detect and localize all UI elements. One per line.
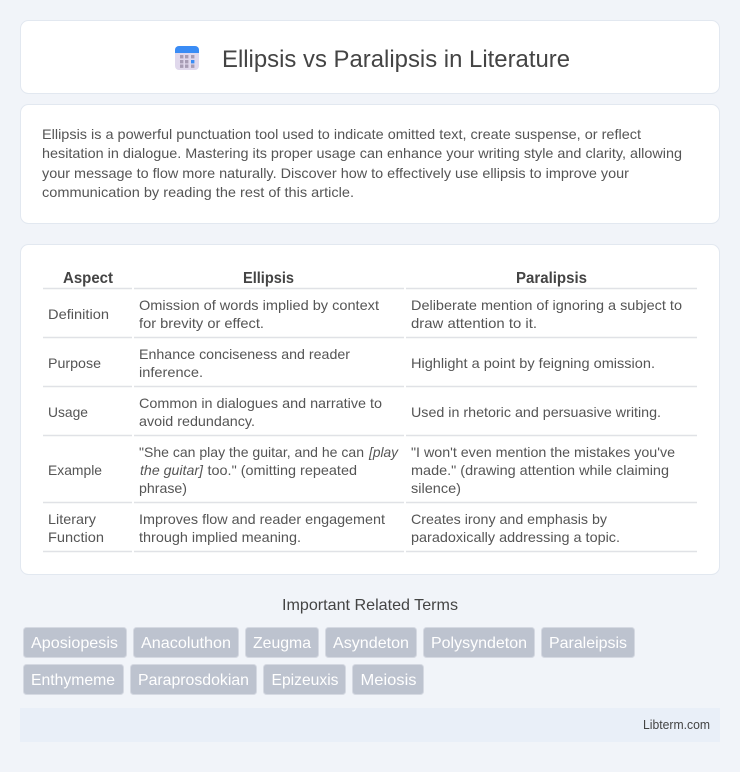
table row: literary function: through implied meaning. <box>139 529 301 545</box>
tag: Aposiopesis: Aposiopesis <box>31 635 118 652</box>
tag: Polysyndeton <box>424 628 534 658</box>
table row: literary function <box>48 511 620 545</box>
footer credit: Libterm.com <box>643 718 710 732</box>
table header: Paralipsis <box>516 270 587 287</box>
title: Ellipsis vs Paralipsis in Literature <box>222 46 570 73</box>
panel: title header <box>20 20 720 94</box>
tag: Aposiopesis <box>24 628 126 658</box>
table row: definition: Omission of words implied by context <box>139 297 379 313</box>
footer <box>20 708 720 742</box>
tag: Polysyndeton: Polysyndeton <box>431 635 527 652</box>
table header: Ellipsis <box>243 270 294 287</box>
table row: example: phrase) <box>139 480 187 496</box>
tag: Asyndeton <box>326 628 416 658</box>
table row: literary function: Improves flow and reader engagement <box>139 511 385 527</box>
table row: purpose: inference. <box>139 364 203 380</box>
heading: related terms: Important Related Terms <box>282 597 458 614</box>
panel: comparison table <box>20 244 720 574</box>
tag: Enthymeme: Enthymeme <box>31 672 115 689</box>
table row: literary function: Creates irony and emphasis by <box>411 511 607 527</box>
tag: Enthymeme <box>24 664 124 694</box>
table row: example: Example <box>48 462 102 478</box>
table row: definition: draw attention to it. <box>411 315 537 331</box>
tag: Epizeuxis: Epizeuxis <box>272 672 338 689</box>
tag: Paraprosdokian <box>130 664 256 694</box>
table row: example: silence) <box>411 480 461 496</box>
tag: Zeugma <box>246 628 318 658</box>
tag: Meiosis <box>352 664 424 694</box>
text block: introduction: hesitation in dialogue. Mastering its proper usage can enhance your writing style and clarity, allowing <box>42 145 682 161</box>
text block: introduction <box>42 126 682 200</box>
table row: purpose: Enhance conciseness and reader <box>139 346 350 362</box>
table row: definition <box>48 297 682 331</box>
table row: literary function: Literary <box>48 511 96 527</box>
table row: example <box>48 444 675 496</box>
tag: Anacoluthon: Anacoluthon <box>141 635 231 652</box>
table row: example: "She can play the guitar, and he can <box>139 444 364 460</box>
table header <box>63 270 587 287</box>
table row: example: made." (drawing attention while claiming <box>411 462 669 478</box>
tag: Paraprosdokian: Paraprosdokian <box>138 672 249 689</box>
table row: purpose <box>48 346 655 380</box>
tag: Anacoluthon <box>134 628 238 658</box>
table row: example: [play <box>368 444 399 460</box>
table row: usage: Usage <box>48 404 88 420</box>
tag: Paraleipsis <box>542 628 634 658</box>
icon: calendar <box>175 46 199 70</box>
table row: definition: for brevity or effect. <box>139 315 264 331</box>
table row: example: "I won't even mention the mistakes you've <box>411 444 675 460</box>
tag: Zeugma: Zeugma <box>253 635 311 652</box>
table row: literary function: Function <box>48 529 104 545</box>
tag: Meiosis: Meiosis <box>360 672 416 689</box>
table row: usage: Common in dialogues and narrative to <box>139 395 382 411</box>
table row: literary function: paradoxically addressing a topic. <box>411 529 620 545</box>
table row: example: the guitar] <box>140 462 204 478</box>
tag: Asyndeton: Asyndeton <box>333 635 409 652</box>
text block: introduction: Ellipsis is a powerful punctuation tool used to indicate omitted text, create suspense, or reflect <box>42 126 641 142</box>
table row: usage <box>48 395 661 429</box>
panel: introduction <box>20 104 720 224</box>
text block: introduction: communication by reading the rest of this article. <box>42 184 354 200</box>
table row: usage: avoid redundancy. <box>139 413 255 429</box>
text block: introduction: your message to flow more naturally. Discover how to effectively use ellipsis to improve your <box>42 165 629 181</box>
table row: purpose: Highlight a point by feigning omission. <box>411 355 655 371</box>
table header: Aspect <box>63 270 114 287</box>
table row: purpose: Purpose <box>48 355 101 371</box>
related term tags <box>24 628 634 694</box>
tag: Paraleipsis: Paraleipsis <box>549 635 627 652</box>
tag: Epizeuxis <box>264 664 346 694</box>
table row: usage: Used in rhetoric and persuasive writing. <box>411 404 661 420</box>
table row: example: too." (omitting repeated <box>208 462 357 478</box>
table row: definition: Deliberate mention of ignoring a subject to <box>411 297 682 313</box>
table row: definition: Definition <box>48 306 109 322</box>
